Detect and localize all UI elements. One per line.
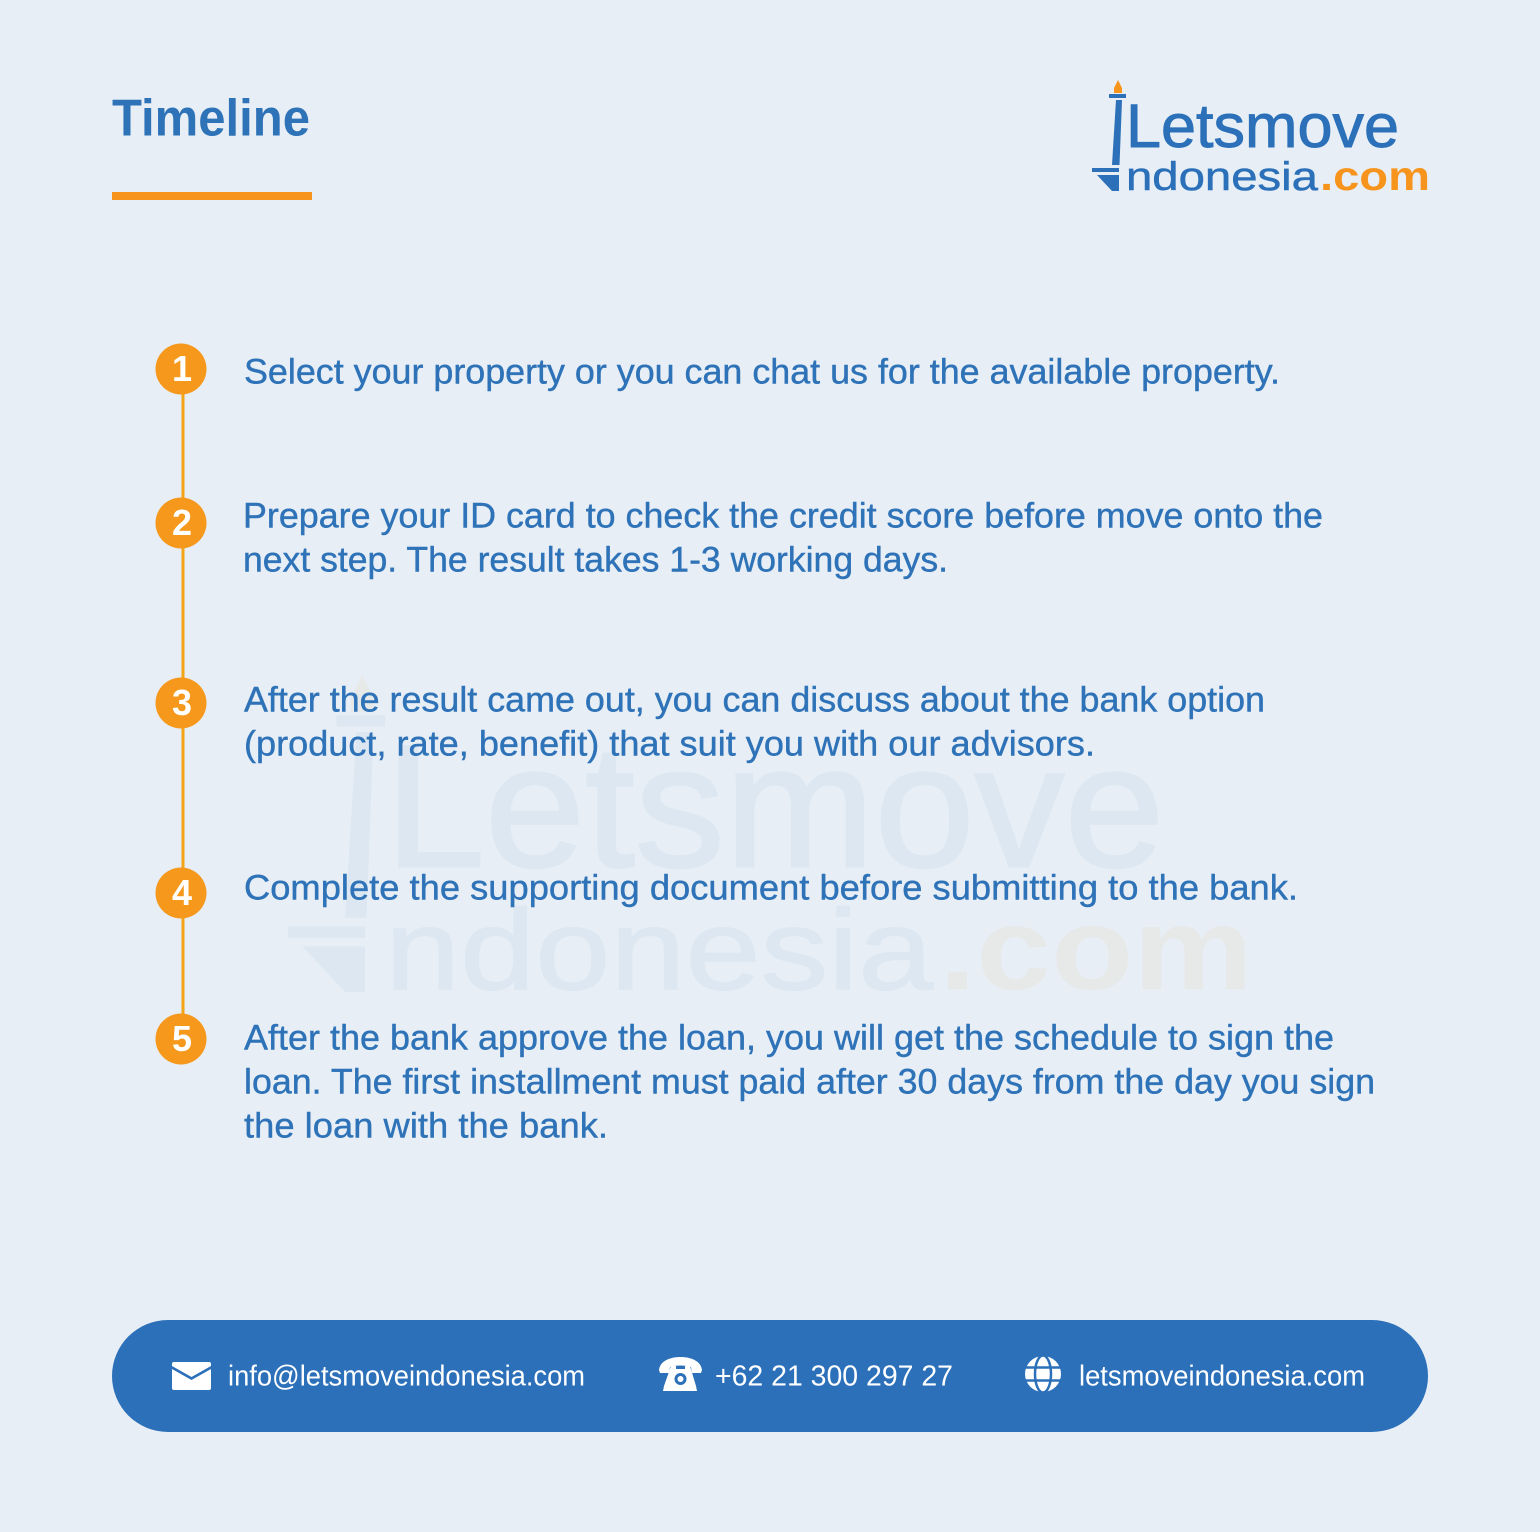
icon: envelope bbox=[172, 1362, 211, 1390]
timeline connector line bbox=[182, 369, 184, 1039]
step 5 bbox=[156, 1014, 1375, 1146]
step 2 bbox=[156, 496, 1323, 580]
email: info@letsmoveindonesia.com bbox=[228, 1360, 585, 1392]
logo wordmark: ndonesia bbox=[1126, 155, 1319, 199]
watermark logo: .com bbox=[939, 883, 1253, 1014]
contact bar bbox=[112, 1320, 1428, 1432]
step 5: loan. The first installment must paid after 30 days from the day you sign bbox=[244, 1062, 1375, 1102]
step 3: 3 bbox=[172, 682, 192, 723]
website: letsmoveindonesia.com bbox=[1079, 1360, 1365, 1392]
step 4: Complete the supporting document before submitting to the bank. bbox=[244, 868, 1298, 908]
step 5: After the bank approve the loan, you will get the schedule to sign the bbox=[244, 1018, 1334, 1058]
phone number: +62 21 300 297 27 bbox=[715, 1360, 953, 1392]
step 5: 5 bbox=[172, 1018, 192, 1059]
step 4: 4 bbox=[172, 872, 192, 913]
watermark logo: Letsmove bbox=[385, 708, 1164, 903]
logo wordmark bbox=[1126, 92, 1430, 199]
step 4 bbox=[156, 868, 1298, 918]
logo wordmark: Letsmove bbox=[1126, 92, 1399, 160]
step 1: 1 bbox=[172, 348, 192, 389]
watermark logo bbox=[288, 675, 1253, 1014]
step 3: (product, rate, benefit) that suit you with our advisors. bbox=[244, 724, 1095, 764]
step 2: 2 bbox=[172, 502, 192, 543]
step 1: Select your property or you can chat us for the available property. bbox=[244, 352, 1280, 392]
step 1 bbox=[156, 344, 1280, 394]
logo wordmark: .com bbox=[1320, 153, 1430, 199]
icon: telephone bbox=[659, 1357, 702, 1391]
step 2: Prepare your ID card to check the credit score before move onto the bbox=[243, 496, 1323, 536]
logo bbox=[1092, 80, 1430, 199]
step 5: the loan with the bank. bbox=[244, 1106, 608, 1146]
step 3 bbox=[156, 678, 1265, 764]
step 2: next step. The result takes 1-3 working days. bbox=[243, 540, 948, 580]
watermark logo: ndonesia bbox=[385, 887, 934, 1014]
icon: globe bbox=[1025, 1356, 1061, 1392]
icon: monument bbox=[1092, 80, 1126, 191]
title bbox=[112, 90, 312, 200]
title: Timeline bbox=[112, 90, 310, 148]
step 3: After the result came out, you can discuss about the bank option bbox=[244, 680, 1265, 720]
